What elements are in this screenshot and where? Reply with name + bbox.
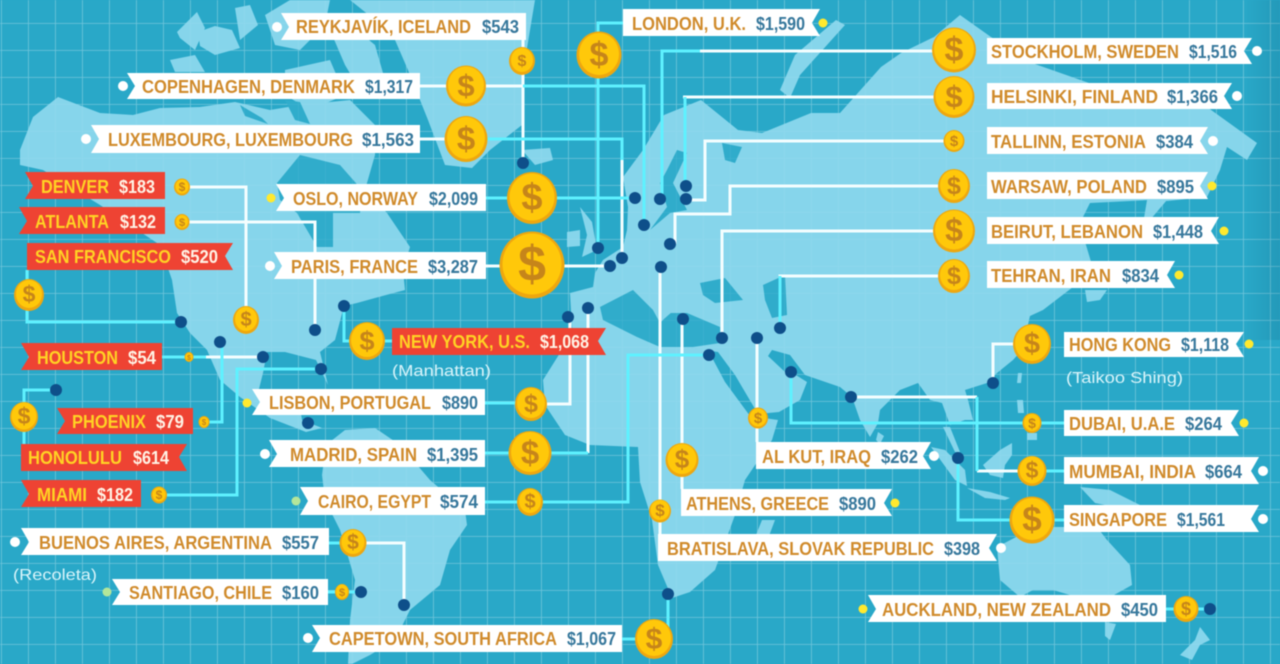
coin: Al Kut: $ [754,410,763,427]
location dots [50,157,1216,615]
coin: Auckland: $ [1181,599,1191,619]
label: Houston: $54 [128,347,157,368]
coin: Reykjavik: $ [518,53,527,70]
label: Paris: $3,287 [428,256,478,277]
coin: Beirut: $ [945,212,963,248]
label: Phoenix [57,408,193,434]
label: Hong Kong: $1,118 [1181,334,1229,355]
label: Lisbon [242,389,485,415]
label: Athens: $890 [839,493,876,514]
label: Helsinki: $1,366 [1167,86,1218,107]
label: Oslo: $2,099 [429,188,478,209]
coin: Hong Kong [1013,324,1051,364]
label: Buenos Aires: BUENOS AIRES, ARGENTINA [39,532,272,553]
label: Tallinn: $384 [1156,131,1194,152]
madagascar [748,520,775,560]
label: Bratislava [658,534,1006,561]
label: Houston: HOUSTON [37,347,118,368]
coin: San Francisco [14,279,44,311]
coin: Bratislava [649,500,671,522]
asian islands [876,200,1167,508]
label: San Francisco: SAN FRANCISCO [35,246,171,267]
coin: Honolulu [10,402,38,432]
coin: Phoenix [198,416,210,428]
label: Denver [25,172,165,199]
label: Hong Kong: HONG KONG [1069,334,1171,355]
label: London: $1,590 [756,13,805,34]
label: Mumbai [1064,457,1268,484]
coin: Lisbon: $ [524,390,538,418]
label: Reykjavik [272,13,526,40]
label: New York: NEW YORK, U.S. [399,331,530,352]
coin: Singapore: $ [1022,500,1042,539]
label: Tehran: TEHRAN, IRAN [991,265,1111,286]
label: Lisbon: LISBON, PORTUGAL [269,392,431,413]
label: Helsinki [987,83,1242,109]
label: Bratislava: BRATISLAVA, SLOVAK REPUBLIC [667,538,934,559]
label: Tehran [987,261,1184,288]
south america [322,428,467,664]
australia [997,527,1132,600]
arctic islands [170,0,385,110]
coin: Madrid: $ [521,434,539,471]
coin: Capetown [635,619,673,659]
coin: Buenos Aires [340,529,366,557]
label: Denver: $183 [119,176,155,197]
label: Athens: ATHENS, GREECE [686,493,829,514]
label: Lisbon: $890 [442,392,478,413]
coin: Stockholm [932,28,976,72]
label: Luxembourg: LUXEMBOURG, LUXEMBOURG [108,129,353,150]
label: Stockholm: STOCKHOLM, SWEDEN [991,41,1179,62]
coin: London [576,32,622,78]
inland seas [240,100,787,347]
coin: Honolulu: $ [18,403,31,429]
label: Copenhagen: COPENHAGEN, DENMARK [142,76,356,97]
label: Al Kut: AL KUT, IRAQ [762,446,871,467]
coin: Atlanta: $ [179,217,185,229]
coin: Paris: $ [518,236,546,292]
label: Beirut: BEIRUT, LEBANON [991,221,1143,242]
africa [543,320,778,598]
label: Copenhagen: $1,317 [365,76,413,97]
label: Buenos Aires [10,528,329,555]
coin: New York: $ [359,326,375,356]
coin: Paris [500,232,564,298]
label: San Francisco [27,243,233,270]
label: Oslo [266,184,486,211]
label: Beirut: $1,448 [1153,221,1203,242]
label: Auckland: AUCKLAND, NEW ZEALAND [882,599,1111,620]
coin: Tallinn: $ [950,133,959,150]
coin: Athens [666,443,698,477]
coin: Miami [151,486,167,504]
caspian [763,275,787,318]
label: London [623,9,828,36]
label: Warsaw: $895 [1157,176,1194,197]
label: Cairo: CAIRO, EGYPT [318,491,432,512]
coin: Capetown: $ [646,623,663,656]
coin: Singapore [1010,496,1054,544]
britain and ireland [567,207,597,257]
label: Tehran: $834 [1122,265,1160,286]
label: Madrid: MADRID, SPAIN [290,444,417,465]
coin: Beirut [933,210,975,252]
coin: Warsaw [938,169,970,203]
note: Recoleta: (Recoleta) [13,567,97,584]
label: New York: $1,068 [540,331,589,352]
label: Miami: MIAMI [37,484,87,505]
coin: Cairo [517,488,543,516]
label: Cairo: $574 [440,491,479,512]
iceland [522,148,553,165]
label: Mumbai: $664 [1205,461,1243,482]
label: Santiago: $160 [282,582,319,603]
label: Warsaw [987,172,1216,199]
coin: Oslo: $ [521,177,543,219]
label: Luxembourg [81,125,420,153]
label: Beirut [987,217,1228,244]
label: Singapore [1064,505,1268,532]
eurasia [570,15,1257,437]
note: Manhattan: (Manhattan) [392,363,491,380]
label: Capetown: CAPETOWN, SOUTH AFRICA [329,628,557,649]
coin: Denver marker [233,306,259,334]
label: Oslo: OSLO, NORWAY [293,188,419,209]
coin: Auckland [1174,596,1198,622]
label: Auckland [858,595,1166,622]
coin: Stockholm: $ [945,31,964,69]
coin: Hong Kong: $ [1024,328,1040,360]
coin: Santiago: $ [339,587,345,599]
coin: Phoenix: $ [202,418,207,427]
label: Paris: PARIS, FRANCE [291,256,418,277]
label: Atlanta: ATLANTA [35,211,109,232]
coin: Mumbai: $ [1026,457,1039,483]
label: Santiago [102,579,328,605]
label: Capetown: $1,067 [567,628,616,649]
coin: Luxembourg [444,116,488,162]
label: Reykjavik: REYKJAVÍK, ICELAND [296,16,471,37]
label: Warsaw: WARSAW, POLAND [991,176,1147,197]
label: Al Kut [756,442,939,469]
label: Honolulu [21,444,187,471]
coin: Tallinn [944,130,964,152]
label: Dubai: DUBAI, U.A.E [1069,413,1175,434]
label: Phoenix: $79 [156,411,184,432]
label: Capetown [303,625,622,652]
label: Cairo [292,487,485,515]
coin: Bratislava: $ [655,501,665,520]
north america [20,97,410,432]
label: Singapore: SINGAPORE [1069,509,1167,530]
coin: Dubai [1022,413,1042,433]
note: Taikoo Shing: (Taikoo Shing) [1066,370,1183,387]
label: Auckland: $450 [1121,599,1158,620]
coin: Denver marker: $ [240,309,252,331]
coin: Mumbai [1018,456,1046,486]
coin: Miami: $ [156,488,163,502]
coin: Denver [174,178,190,196]
coin: Athens: $ [675,444,690,474]
baltic [650,150,687,230]
arctic channels [240,100,310,124]
label: Athens [681,489,900,516]
label: Reykjavik: $543 [482,16,519,37]
label: Houston [21,343,162,370]
coin: Houston [184,352,194,362]
hudson bay [277,155,362,247]
novaya zemlya [780,20,845,98]
coin: Buenos Aires: $ [347,531,359,554]
new zealand and tasmania [1105,622,1210,660]
coin: Copenhagen: $ [457,68,475,103]
label: Atlanta: $132 [120,211,156,232]
coin: Lisbon [515,387,547,421]
coin: Cairo: $ [524,491,536,513]
label: Tallinn [987,127,1218,154]
label: Singapore: $1,561 [1177,509,1225,530]
label: Dubai: $264 [1185,413,1223,434]
label: Stockholm: $1,516 [1189,41,1237,62]
coin: Al Kut [748,408,768,428]
label: Mumbai: MUMBAI, INDIA [1069,461,1196,482]
label: Bratislava: $398 [944,538,980,559]
label: Stockholm [987,38,1262,64]
label: Miami: $182 [97,484,133,505]
label: Honolulu: HONOLULU [28,447,122,468]
black sea [700,278,743,303]
label: Honolulu: $614 [133,447,170,468]
coin: Oslo [507,172,557,224]
label: Denver: DENVER [41,176,109,197]
label: Hong Kong [1064,332,1254,357]
label: Dubai [1064,410,1248,436]
label: Tallinn: TALLINN, ESTONIA [991,131,1146,152]
label: Buenos Aires: $557 [282,532,319,553]
label: Madrid: $1,395 [427,444,478,465]
coin: Warsaw: $ [947,172,961,200]
coin: Tehran: $ [947,262,961,290]
italy [640,285,672,318]
white sea [722,143,742,163]
coin: New York [349,322,385,360]
label: Luxembourg: $1,563 [362,129,414,150]
greenland [350,0,535,168]
coin: Madrid [508,431,552,475]
label: Paris [265,252,486,279]
coin: Tehran [938,259,970,293]
coin: San Francisco: $ [23,281,36,307]
coin: Dubai: $ [1028,415,1036,431]
label: Santiago: SANTIAGO, CHILE [129,582,272,603]
coin: Copenhagen [446,66,486,106]
label: New York [392,328,606,355]
label: London: LONDON, U.K. [632,13,746,34]
coin: Denver: $ [179,180,186,194]
coin: Reykjavik [509,47,535,75]
mediterranean [600,290,720,347]
coin: London: $ [590,36,609,74]
label: Atlanta [19,207,165,234]
label: Miami [21,480,141,507]
label: Copenhagen [118,73,420,99]
label: San Francisco: $520 [181,246,218,267]
coin: Atlanta [174,214,190,230]
label: Phoenix: PHOENIX [72,411,147,432]
coin: Houston: $ [187,355,191,362]
coin: Santiago [335,584,349,600]
label: Al Kut: $262 [881,446,918,467]
coin: Helsinki [934,76,974,118]
label: Madrid [260,440,485,467]
coin: Helsinki: $ [945,79,963,114]
coin: Luxembourg: $ [457,120,475,157]
label: Helsinki: HELSINKI, FINLAND [991,86,1158,107]
